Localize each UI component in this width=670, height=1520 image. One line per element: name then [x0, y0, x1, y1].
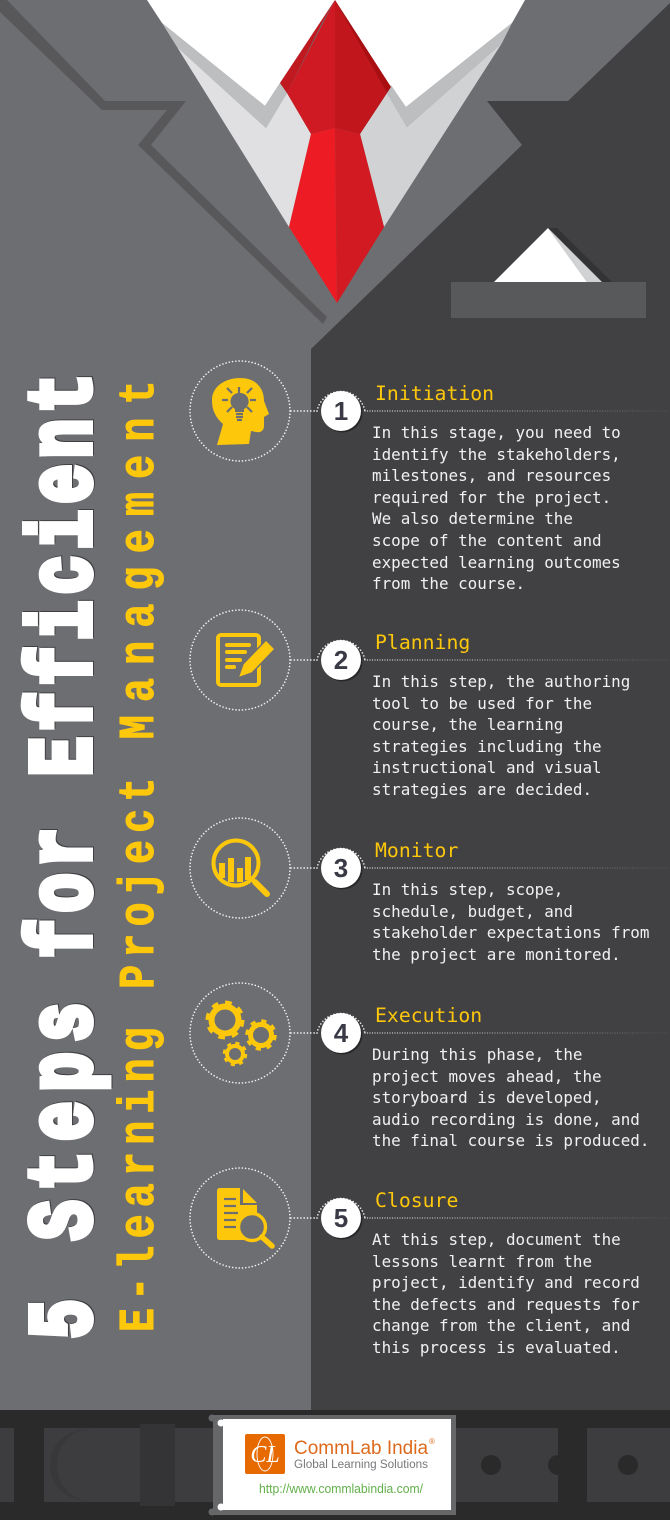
icon: document with magnifier — [190, 1168, 290, 1268]
text block: Monitor: the project are monitored. — [372, 945, 621, 964]
connector and number badge: 3 — [334, 853, 348, 883]
connector and number badge: 5 — [334, 1203, 348, 1233]
heading: Initiation: Initiation — [375, 382, 494, 405]
heading: Planning: Planning — [375, 631, 470, 654]
text block: Monitor — [372, 880, 649, 964]
text block: Initiation: We also determine the — [372, 509, 573, 528]
connector and number badge — [291, 1198, 670, 1240]
text block: Initiation: expected learning outcomes — [372, 553, 621, 572]
icon: document and pencil — [190, 610, 290, 710]
text block: Monitor: In this step, scope, — [372, 880, 563, 899]
heading: Monitor: Monitor — [375, 839, 458, 862]
step 2: Planning — [190, 610, 670, 799]
text block: Initiation: milestones, and resources — [372, 466, 611, 485]
text block: Planning: strategies are decided. — [372, 780, 592, 799]
logo registered mark: ® — [429, 1437, 435, 1446]
text block: Closure — [372, 1230, 640, 1357]
text block: Execution: During this phase, the — [372, 1045, 582, 1064]
step 3: Monitor — [190, 818, 670, 964]
connector and number badge — [291, 848, 670, 890]
text block: Initiation: from the course. — [372, 574, 525, 593]
title: 5 Steps for Efficient: 5 Steps for Efficient — [18, 367, 117, 1338]
left lapel stitching — [0, 0, 327, 324]
text block: Execution: the final course is produced. — [372, 1131, 649, 1150]
text block: Planning — [372, 672, 630, 799]
necktie — [280, 0, 391, 303]
text block: Planning: tool to be used for the — [372, 694, 592, 713]
belt buckle with logo — [208, 1414, 456, 1516]
pocket with white handkerchief — [451, 228, 646, 318]
text block: Initiation: scope of the content and — [372, 531, 602, 550]
text block: Closure: At this step, document the — [372, 1230, 621, 1249]
connector and number badge — [291, 391, 670, 432]
step 4: Execution — [190, 983, 670, 1150]
logo tagline: Global Learning Solutions — [294, 1459, 428, 1471]
text block: Monitor: stakeholder expectations from — [372, 923, 649, 942]
belt — [0, 1410, 670, 1520]
text block: Initiation — [372, 423, 621, 593]
text block: Execution — [372, 1045, 649, 1150]
text block: Planning: instructional and visual — [372, 758, 602, 777]
text block: Initiation: In this stage, you need to — [372, 423, 621, 442]
connector and number badge — [291, 1013, 670, 1054]
text block: Closure: this process is evaluated. — [372, 1338, 621, 1357]
text block: Closure: project, identify and record — [372, 1273, 640, 1292]
panel: suit right dark side — [311, 3, 670, 1410]
text block: Planning: course, the learning — [372, 715, 563, 734]
connector and number badge: 2 — [334, 645, 348, 675]
text block: Monitor: schedule, budget, and — [372, 902, 573, 921]
shirt and collar — [147, 0, 525, 227]
text block: Planning: In this step, the authoring — [372, 672, 630, 691]
text block: Closure: the defects and requests for — [372, 1295, 640, 1314]
text block: Closure: lessons learnt from the — [372, 1252, 592, 1271]
text block: Execution: audio recording is done, and — [372, 1110, 640, 1129]
text block: Execution: project moves ahead, the — [372, 1067, 602, 1086]
connector and number badge — [291, 640, 670, 682]
connector and number badge: 4 — [334, 1018, 349, 1048]
subtitle: E-learning Project Management: E-learning Project Management — [111, 367, 168, 1332]
heading: Execution: Execution — [375, 1004, 482, 1027]
website url: http://www.commlabindia.com/ — [259, 1482, 424, 1496]
text block: Planning: strategies including the — [372, 737, 602, 756]
step 1: Initiation — [190, 361, 670, 593]
logo name: CommLab India — [294, 1438, 428, 1459]
heading: Closure: Closure — [375, 1189, 458, 1212]
icon: three gears — [190, 983, 290, 1083]
logo mark — [245, 1434, 285, 1474]
connector and number badge: 1 — [334, 396, 348, 426]
text block: Execution: storyboard is developed, — [372, 1088, 602, 1107]
text block: Initiation: required for the project. — [372, 488, 611, 507]
text block: Initiation: identify the stakeholders, — [372, 445, 621, 464]
step 5: Closure — [190, 1168, 670, 1357]
text block: Closure: change from the client, and — [372, 1316, 630, 1335]
logo mark: CL — [250, 1442, 280, 1468]
icon: magnifier over bar chart — [190, 818, 290, 918]
icon: head with light bulb — [190, 361, 290, 461]
